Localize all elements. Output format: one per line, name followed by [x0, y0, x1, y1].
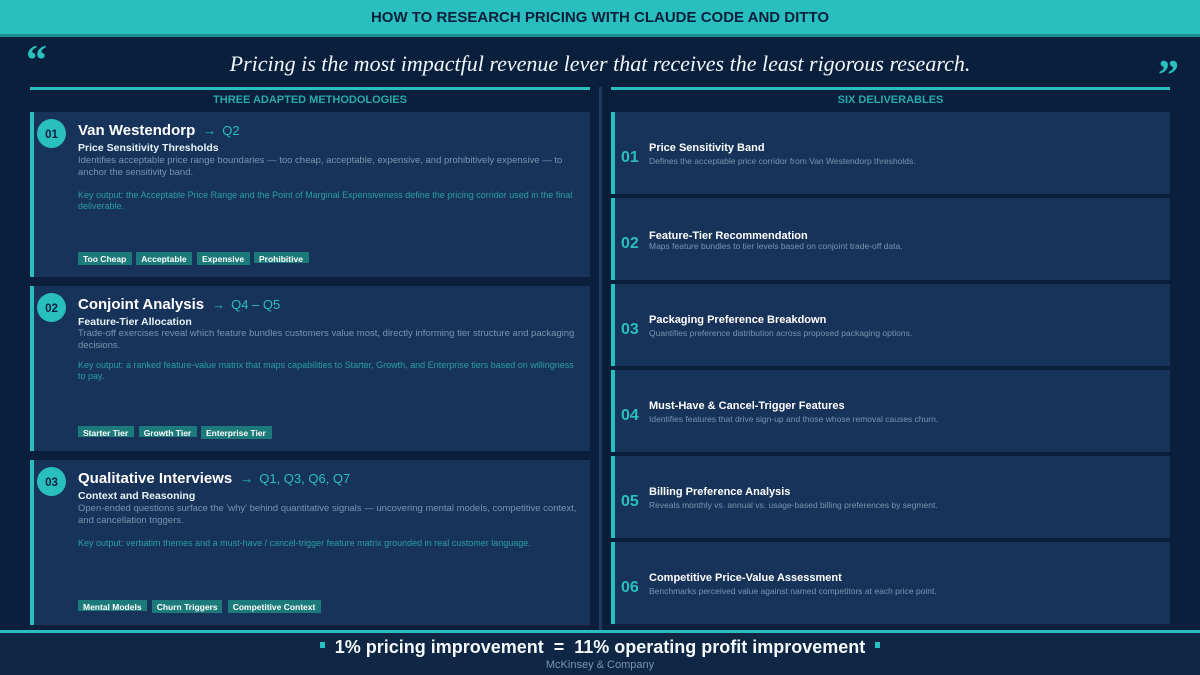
- deliverable description: Quantifies preference distribution across proposed packaging options.: [649, 328, 912, 338]
- deliverable title: Must-Have & Cancel-Trigger Features: [649, 400, 845, 412]
- badge 02: 02: [45, 303, 58, 315]
- deliverable 04: [611, 370, 1170, 452]
- key output: Key output: the Acceptable Price Range and the Point of Marginal Expensiveness define the pricing corridor used in the final deliverable.: [78, 190, 572, 211]
- right column heading: SIX DELIVERABLES: [838, 94, 943, 106]
- number: 03: [621, 320, 639, 338]
- tag: Competitive Context: Competitive Context: [233, 602, 315, 612]
- left square marker: [320, 642, 325, 648]
- title: HOW TO RESEARCH PRICING WITH CLAUDE CODE AND DITTO: [371, 9, 829, 26]
- number: 01: [621, 148, 639, 166]
- deliverable title: Price Sensitivity Band: [649, 142, 765, 154]
- column divider: [599, 87, 602, 630]
- tag: Expensive: Expensive: [202, 254, 244, 264]
- tag: Competitive Context: [228, 600, 321, 613]
- deliverable description: Defines the acceptable price corridor from Van Westendorp thresholds.: [649, 156, 916, 166]
- badge 01: 01: [45, 129, 58, 141]
- badge 02: [37, 293, 66, 322]
- deliverable 05: [611, 456, 1170, 538]
- deliverable 01: [611, 112, 1170, 194]
- card: Qualitative Interviews: [30, 460, 590, 625]
- tag: Too Cheap: [78, 252, 132, 265]
- panel: six deliverables: [611, 87, 1170, 108]
- tag: Expensive: [197, 252, 250, 265]
- tag: Starter Tier: [78, 426, 134, 437]
- tag: Growth Tier: [139, 426, 197, 437]
- header bar: [0, 0, 1200, 37]
- tag: Acceptable: Acceptable: [141, 254, 187, 264]
- card title: Qualitative Interviews → Q1, Q3, Q6, Q7: [78, 470, 350, 487]
- footer statistic: 1% pricing improvement = 11% operating profit improvement: [335, 636, 865, 656]
- key output: Key output: a ranked feature-value matrix that maps capabilities to Starter, Growth, and Enterprise tiers based on willingness to pay.: [78, 360, 574, 381]
- number: 04: [621, 406, 639, 424]
- tag: Churn Triggers: [152, 600, 222, 613]
- number: 02: [621, 234, 639, 252]
- deliverable description: Maps feature bundles to tier levels based on conjoint trade-off data.: [649, 241, 903, 251]
- deliverable description: Reveals monthly vs. annual vs. usage-based billing preferences by segment.: [649, 500, 938, 510]
- tag: Acceptable: [136, 252, 192, 265]
- card: Conjoint Analysis: [30, 286, 590, 451]
- tag: Enterprise Tier: [201, 426, 272, 439]
- card description: Open-ended questions surface the 'why' behind quantitative signals — uncovering mental models, competitive context, and cancellation triggers.: [78, 503, 576, 526]
- card: Van Westendorp: [30, 112, 590, 277]
- card title: Conjoint Analysis → Q4 – Q5: [78, 296, 280, 313]
- card subtitle: Price Sensitivity Thresholds: [78, 142, 219, 154]
- card description: Identifies acceptable price range boundaries — too cheap, acceptable, expensive, and prohibitively expensive — to anchor the sensitivity band.: [78, 155, 562, 178]
- badge 03: 03: [45, 477, 58, 489]
- deliverable title: Competitive Price-Value Assessment: [649, 572, 842, 584]
- left column heading: THREE ADAPTED METHODOLOGIES: [213, 94, 407, 106]
- footer band: [0, 630, 1200, 675]
- card description: Trade-off exercises reveal which feature bundles customers value most, directly informing tier structure and packaging decisions.: [78, 328, 574, 351]
- footer source: McKinsey & Company: [546, 659, 654, 671]
- card subtitle: Context and Reasoning: [78, 490, 195, 502]
- pull quote: Pricing is the most impactful revenue lever that receives the least rigorous research.: [230, 51, 970, 76]
- key output: Key output: verbatim themes and a must-have / cancel-trigger feature matrix grounded in real customer language.: [78, 538, 531, 548]
- opening quote mark: “: [26, 38, 47, 84]
- badge 03: [37, 467, 66, 496]
- tag: Too Cheap: Too Cheap: [83, 254, 126, 264]
- deliverable 03: [611, 284, 1170, 366]
- card subtitle: Feature-Tier Allocation: [78, 316, 192, 328]
- tag: Prohibitive: [254, 252, 309, 263]
- number: 05: [621, 492, 639, 510]
- card title: Van Westendorp → Q2: [78, 122, 240, 139]
- deliverable description: Identifies features that drive sign-up and those whose removal causes churn.: [649, 414, 938, 424]
- closing quote mark: ”: [1158, 53, 1179, 99]
- deliverable 02: [611, 198, 1170, 280]
- right square marker: [875, 642, 880, 648]
- deliverable title: Packaging Preference Breakdown: [649, 314, 826, 326]
- number: 06: [621, 578, 639, 596]
- deliverable description: Benchmarks perceived value against named competitors at each price point.: [649, 586, 937, 596]
- deliverable title: Billing Preference Analysis: [649, 486, 790, 498]
- panel: three adapted methodologies: [30, 87, 590, 108]
- deliverable title: Feature-Tier Recommendation: [649, 230, 808, 242]
- tag: Enterprise Tier: Enterprise Tier: [206, 428, 266, 438]
- tag: Churn Triggers: Churn Triggers: [157, 602, 218, 612]
- badge 01: [37, 119, 66, 148]
- deliverable 06: [611, 542, 1170, 624]
